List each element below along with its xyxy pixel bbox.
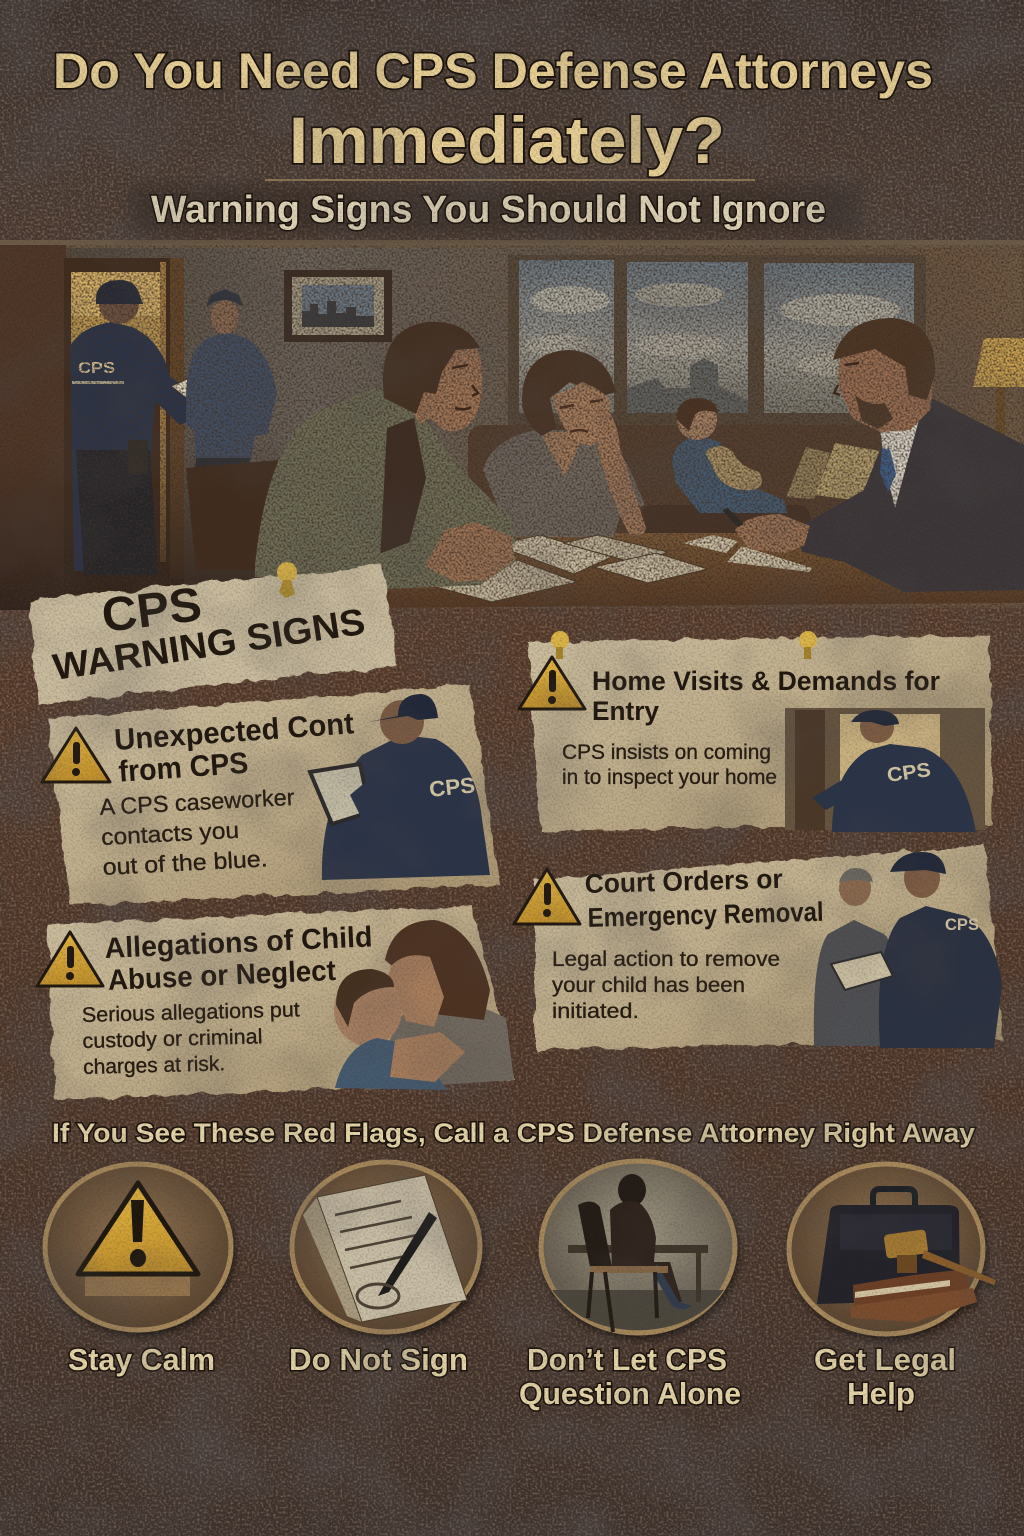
- card heading: [104, 921, 374, 997]
- card body: contacts you: [100, 817, 240, 850]
- card body: CPS insists on coming: [562, 741, 771, 764]
- action: do not sign: [289, 1162, 480, 1377]
- card body: Serious allegations put: [82, 998, 300, 1027]
- illustration: caseworker with tablet: CPS: [428, 772, 476, 802]
- action: stay calm: [45, 1164, 231, 1377]
- card body: [552, 948, 780, 1023]
- illustration: caseworker with tablet: [310, 694, 490, 880]
- card body: Legal action to remove: [552, 948, 780, 971]
- heading: main title line 1: Do You Need CPS Defense Attorneys: [53, 43, 933, 99]
- card heading: [584, 863, 824, 933]
- card body: in to inspect your home: [562, 766, 777, 789]
- card body: initiated.: [552, 1000, 639, 1023]
- warning icon: [37, 932, 103, 986]
- child with teddy bear: [672, 398, 788, 513]
- card heading: Home Visits & Demands for: [592, 666, 940, 696]
- warning icon: [42, 728, 110, 782]
- card body: A CPS caseworker: [99, 784, 295, 820]
- illustration: officer and CPS worker with order: CPS: [945, 915, 979, 934]
- action: get legal help: [789, 1164, 996, 1411]
- illustration: officer and CPS worker with order: [814, 852, 1002, 1048]
- police officer: [186, 289, 277, 488]
- label line 2: Question Alone: [519, 1376, 741, 1411]
- woman: [483, 350, 646, 537]
- label: Stay Calm: [68, 1342, 215, 1377]
- attorney in dark suit: [722, 318, 1024, 592]
- jacket label: CPS: [78, 360, 115, 377]
- card body: [562, 741, 777, 789]
- card heading: Entry: [592, 696, 659, 726]
- medallion with briefcase, gavel and books: [789, 1164, 996, 1334]
- pushpin left: [551, 631, 569, 659]
- label line 1: Get Legal: [814, 1342, 956, 1377]
- pushpin right: [799, 631, 817, 659]
- card heading: Court Orders or: [584, 864, 784, 899]
- heading: main title line 2: Immediately?: [289, 103, 725, 177]
- illustration: mother hugging child: [334, 920, 514, 1090]
- framed city picture: [284, 270, 392, 342]
- card heading: [592, 666, 940, 726]
- wooden chair: [186, 460, 278, 570]
- medallion with seated silhouette: [541, 1161, 735, 1333]
- panel: allegations of child abuse or neglect: [37, 905, 515, 1100]
- sign subheading: WARNING SIGNS: [50, 601, 368, 688]
- wall: [0, 245, 1024, 607]
- lamp: [973, 338, 1024, 437]
- three windows: [508, 255, 926, 427]
- card body: [82, 998, 302, 1079]
- clipboard: [171, 369, 225, 405]
- action: don't let CPS question alone: [519, 1161, 741, 1411]
- medallion with document and pen: [292, 1162, 480, 1332]
- hands and pen: [735, 514, 810, 553]
- card body: out of the blue.: [102, 845, 268, 880]
- sofa: [468, 425, 892, 535]
- panel: CPS warning signs sign: [28, 562, 396, 705]
- title block: [53, 43, 933, 234]
- illustration: caseworker at door: CPS: [886, 759, 932, 787]
- subtitle band: [130, 186, 860, 234]
- doorway: [64, 258, 184, 608]
- panel: home visits and demands for entry: [519, 631, 992, 832]
- card heading: Emergency Removal: [587, 897, 824, 933]
- card body: [99, 784, 298, 880]
- card body: your child has been: [552, 974, 745, 997]
- label: Do Not Sign: [289, 1342, 468, 1377]
- table: [378, 533, 1024, 608]
- panel: court orders or emergency removal: [514, 845, 1003, 1050]
- card heading: Allegations of Child: [104, 921, 373, 965]
- card heading: Abuse or Neglect: [107, 955, 337, 997]
- CPS worker at door: [70, 280, 225, 575]
- man in green shirt: [255, 322, 516, 589]
- warning icon: [514, 869, 580, 924]
- medallion with warning icon: [45, 1164, 231, 1330]
- scene illustration: family meeting with attorney while CPS at the door: [0, 240, 1024, 610]
- pushpin: [277, 562, 297, 598]
- card heading: [113, 707, 357, 789]
- card heading: Unexpected Cont: [113, 707, 355, 757]
- floor shadow: [0, 440, 380, 610]
- papers on table: [392, 535, 812, 602]
- card heading: from CPS: [117, 747, 249, 789]
- card body: custody or criminal: [82, 1025, 263, 1053]
- panel: unexpected contact from CPS: [42, 685, 500, 905]
- warning icon: [519, 657, 585, 709]
- label line 2: Help: [847, 1376, 915, 1411]
- label line 1: Don’t Let CPS: [527, 1342, 727, 1377]
- sign heading: CPS: [99, 578, 205, 643]
- arm supporting face: [598, 400, 646, 536]
- red flags call to action line: If You See These Red Flags, Call a CPS Defense Attorney Right Away: [52, 1118, 975, 1148]
- card body: charges at risk.: [83, 1052, 225, 1079]
- illustration: caseworker at door: [785, 708, 985, 832]
- subtitle: Warning Signs You Should Not Ignore: [151, 189, 826, 231]
